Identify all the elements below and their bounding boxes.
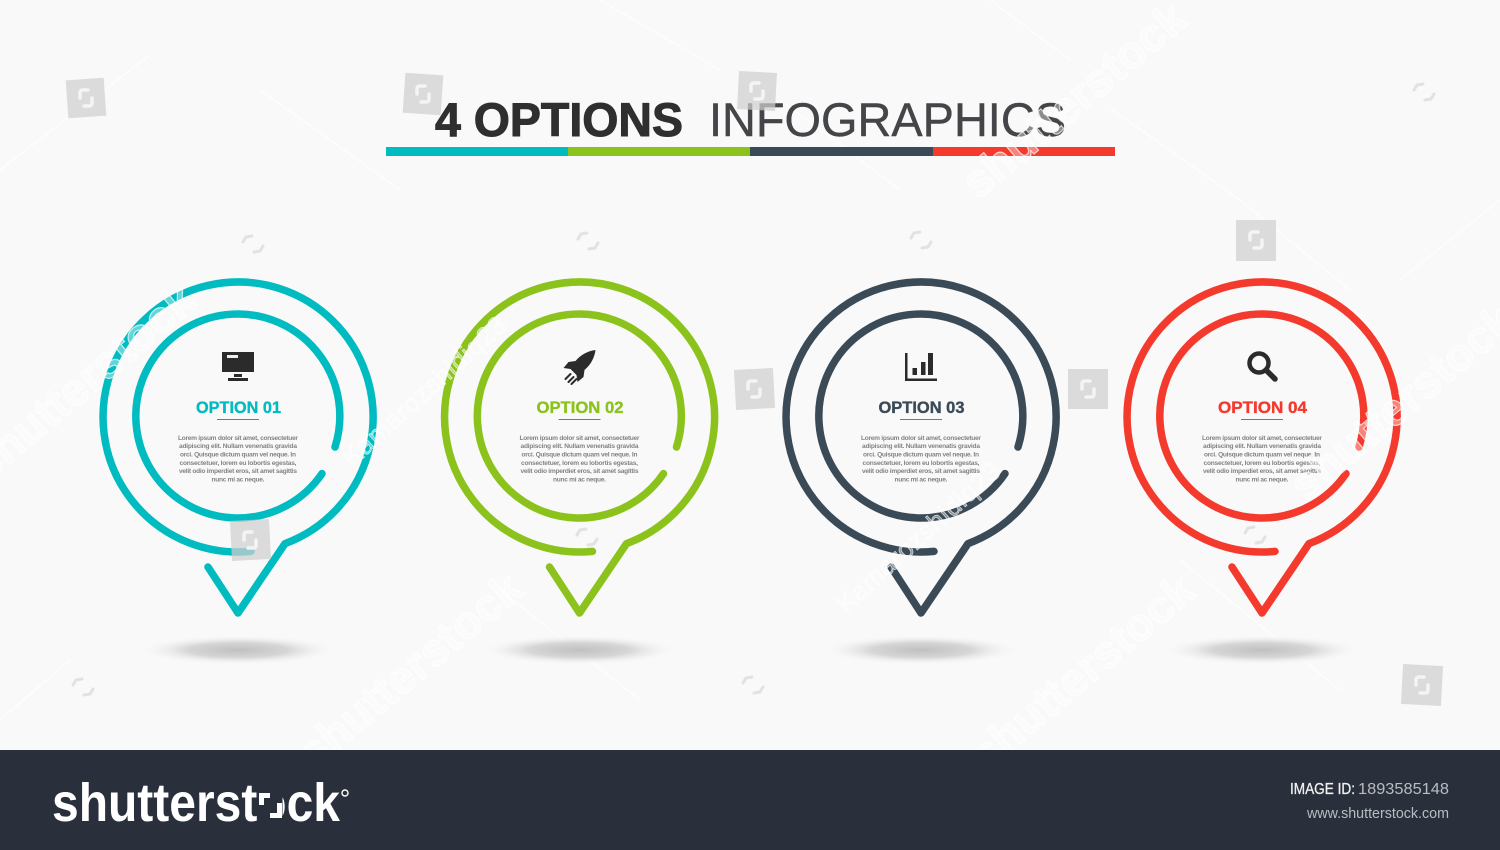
- pin outline: [1127, 282, 1397, 613]
- text block: orci. Quisque dictum quam vel neque. In: [180, 452, 296, 458]
- ground shadow: [1162, 635, 1362, 665]
- text block: Lorem ipsum dolor sit amet, consectetuer: [178, 435, 298, 442]
- panel: option 04: [1127, 282, 1397, 665]
- text block: orci. Quisque dictum quam vel neque. In: [1204, 452, 1320, 458]
- inner arc: [819, 314, 1023, 518]
- title colour bar: [386, 147, 1115, 156]
- text block: velit odio imperdiet eros, sit amet sagittis: [1203, 468, 1321, 475]
- heading: OPTION 04: [1218, 399, 1308, 417]
- title: INFOGRAPHICS: [709, 93, 1066, 146]
- text block: [520, 435, 640, 484]
- icon: rocket: [564, 350, 596, 384]
- text block: adipiscing elit. Nullam venenatis gravida: [520, 443, 639, 450]
- text block: consectetuer, lorem eu lobortis egestas,: [1203, 460, 1321, 467]
- watermark overlay: Kamarozshidiq23: [830, 456, 1006, 619]
- website: www.shutterstock.com: [1306, 805, 1449, 822]
- text block: consectetuer, lorem eu lobortis egestas,: [179, 460, 297, 467]
- text block: velit odio imperdiet eros, sit amet sagittis: [520, 468, 639, 475]
- icon: bar chart: [905, 353, 937, 381]
- text block: velit odio imperdiet eros, sit amet sagittis: [862, 468, 980, 475]
- footer bar: [0, 750, 1500, 850]
- panel: option 03: [786, 282, 1056, 665]
- pin outline: [786, 282, 1056, 613]
- icon: magnifier: [1250, 354, 1275, 379]
- inner arc: [477, 314, 681, 518]
- pin outline: [445, 282, 715, 613]
- watermark overlay: shutterstock: [287, 561, 532, 778]
- panel: option 01: [103, 282, 373, 665]
- text block: nunc mi ac neque.: [1236, 476, 1289, 484]
- text block: adipiscing elit. Nullam venenatis gravida: [179, 443, 297, 450]
- text block: nunc mi ac neque.: [894, 476, 948, 484]
- text block: velit odio imperdiet eros, sit amet sagittis: [179, 468, 297, 475]
- underline: [558, 419, 600, 420]
- heading: OPTION 03: [878, 399, 964, 417]
- text block: Lorem ipsum dolor sit amet, consectetuer: [520, 435, 640, 442]
- ground shadow: [821, 635, 1021, 665]
- heading: OPTION 01: [196, 399, 281, 417]
- text block: Lorem ipsum dolor sit amet, consectetuer: [1202, 435, 1322, 442]
- panel: option 02: [445, 282, 715, 665]
- text block: nunc mi ac neque.: [553, 476, 606, 484]
- inner arc: [136, 314, 340, 518]
- text block: Lorem ipsum dolor sit amet, consectetuer: [861, 435, 981, 442]
- text block: orci. Quisque dictum quam vel neque. In: [522, 452, 637, 458]
- watermark overlay: shutterstock: [959, 563, 1204, 780]
- shutterstock logo: shutterstock: [52, 773, 341, 833]
- text block: orci. Quisque dictum quam vel neque. In: [863, 452, 979, 458]
- title: [435, 93, 1066, 146]
- text block: adipiscing elit. Nullam venenatis gravida: [862, 443, 980, 450]
- footer bar: 1893585148: [1358, 781, 1449, 798]
- text block: consectetuer, lorem eu lobortis egestas,: [862, 460, 980, 467]
- text block: [178, 435, 298, 484]
- title: 4 OPTIONS: [435, 93, 683, 146]
- watermark overlay: Kamarozshidiq23: [336, 310, 512, 473]
- text block: [861, 435, 981, 484]
- text block: [1202, 435, 1322, 484]
- text block: nunc mi ac neque.: [212, 476, 265, 484]
- pin outline: [103, 282, 373, 613]
- icon: monitor: [222, 352, 254, 381]
- underline: [900, 419, 942, 420]
- underline: [217, 419, 259, 420]
- image id: IMAGE ID:: [1290, 781, 1355, 798]
- ground shadow: [138, 635, 338, 665]
- inner arc: [1160, 314, 1364, 518]
- ground shadow: [480, 635, 680, 665]
- text block: consectetuer, lorem eu lobortis egestas,: [521, 460, 638, 467]
- underline: [1241, 419, 1283, 420]
- heading: OPTION 02: [536, 399, 624, 417]
- text block: adipiscing elit. Nullam venenatis gravida: [1203, 443, 1321, 450]
